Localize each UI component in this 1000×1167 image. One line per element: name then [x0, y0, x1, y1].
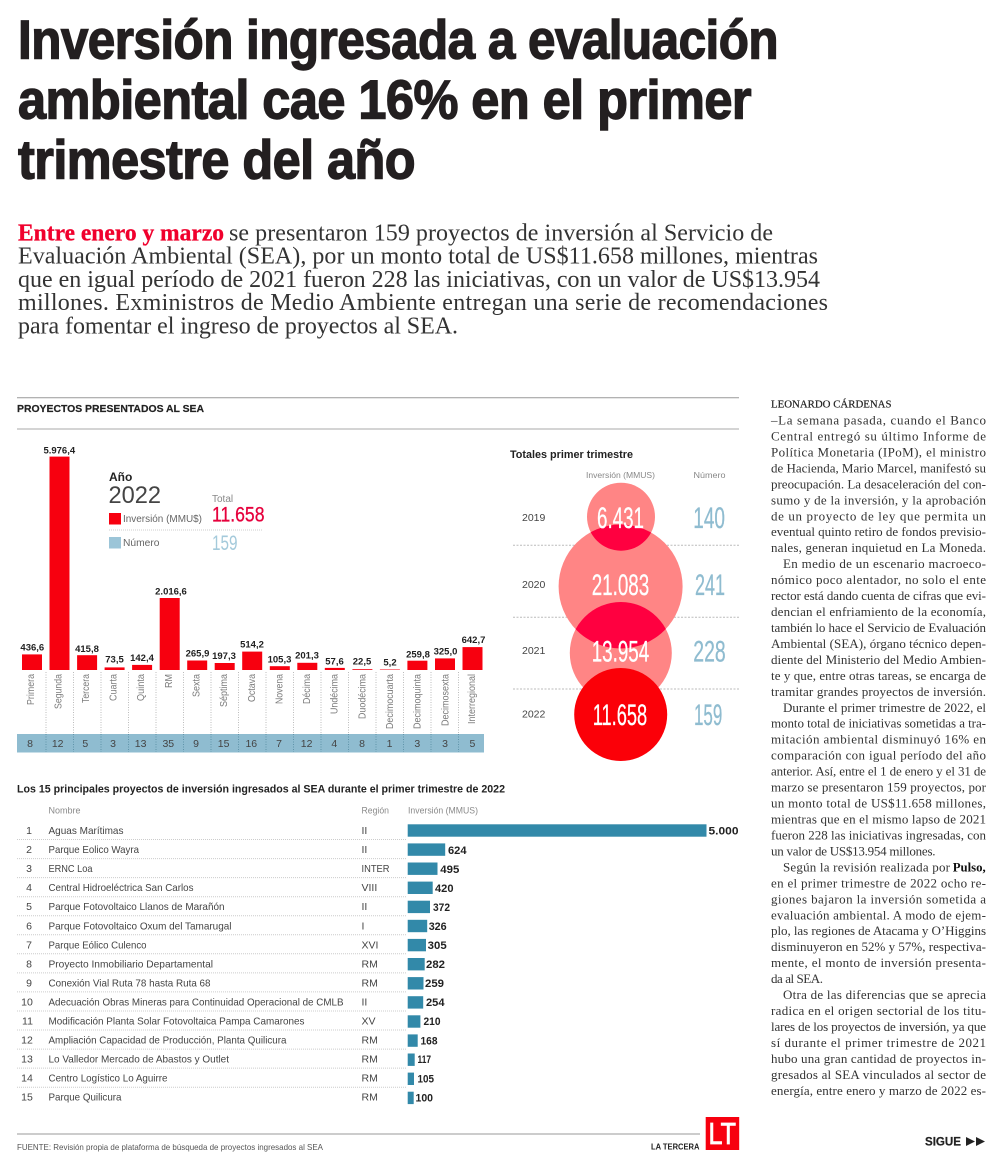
bar values: 5.000: [708, 826, 738, 838]
logo: La Tercera: LT: [708, 1116, 736, 1151]
project names: Conexión Vial Ruta 78 hasta Ruta 68: [48, 977, 211, 989]
region labels: Decimocuarta: [385, 674, 396, 729]
article body: sumo y de la inversión, y la aprobación: [771, 492, 986, 507]
article body: mitación ambiental disminuyó 16% en: [771, 732, 986, 747]
project names: Parque Eolico Wayra: [48, 844, 139, 856]
legend: año 2022: 159: [212, 532, 238, 555]
title: [18, 8, 778, 190]
bar values: 2.016,6: [155, 586, 187, 598]
region labels: Undécima: [330, 674, 340, 714]
horizontal bar chart: [408, 824, 738, 1104]
project names: Parque Fotovoltaico Llanos de Marañón: [48, 901, 225, 913]
rank numbers: [21, 825, 33, 1104]
rank numbers: 6: [26, 920, 32, 932]
bar values: 420: [435, 883, 454, 895]
region labels: [26, 674, 478, 729]
panel: totales primer trimestre: [510, 449, 739, 761]
region codes: XV: [362, 1016, 376, 1028]
region labels: RM: [164, 674, 175, 688]
table headers: Región: [362, 805, 389, 816]
article body: sí durante el primer trimestre de 2021: [771, 1035, 986, 1050]
bar values: 259: [425, 978, 444, 990]
project names: Aguas Marítimas: [48, 825, 124, 837]
bar values: 142,4: [130, 653, 155, 664]
rank numbers: 2: [26, 844, 32, 856]
bar values: [20, 446, 485, 668]
bar chart: inversion by region: [20, 446, 485, 729]
bar values: 105: [418, 1073, 434, 1085]
bar values: 282: [426, 959, 445, 971]
region labels: Decimosexta: [440, 674, 451, 726]
lead paragraph: Entre enero y marzo: [18, 221, 224, 247]
title: trimestre del año: [18, 128, 415, 190]
year labels: 2019: [522, 512, 546, 524]
article body: en el primer trimestre de 2022 ocho re-: [771, 875, 986, 890]
year labels: 2020: [522, 579, 546, 591]
article body: da al SEA.: [771, 971, 823, 986]
bar values: 5,2: [383, 658, 397, 668]
article body: disminuyeron en 52% y 57%, respectiva-: [771, 939, 986, 954]
region labels: Decimoquinta: [413, 674, 424, 729]
region codes: RM: [362, 977, 378, 989]
numero band: 8: [359, 738, 365, 750]
article body: gresados al SEA vinculados al sector de: [771, 1067, 986, 1082]
region labels: Octava: [247, 674, 258, 702]
article body: energía, entre enero y marzo de 2022 es-: [771, 1083, 986, 1098]
project names: Parque Eólico Culenco: [48, 939, 147, 951]
region labels: Segunda: [54, 674, 64, 709]
article body: nómico poco alentador, no solo el ente: [771, 572, 986, 587]
lead paragraph: se presentaron 159 proyectos de inversión al Servicio de: [229, 221, 773, 247]
bar values: [416, 826, 738, 1104]
numero band: 5: [82, 738, 88, 750]
bar values: 168: [420, 1035, 438, 1047]
legend: año 2022: 2022: [108, 482, 161, 509]
section heading: PROYECTOS PRESENTADOS AL SEA: [17, 403, 204, 415]
investment values: 21.083: [592, 569, 649, 602]
article body: te y que, entre otras tareas, se encarga de: [771, 668, 986, 683]
footer source: FUENTE: Revisión propia de plataforma de búsqueda de proyectos ingresados al SEA: [17, 1142, 323, 1152]
project names: Centro Logístico Lo Aguirre: [48, 1073, 168, 1085]
article body: un monto total de US$11.658 millones,: [771, 796, 986, 810]
rank numbers: 4: [26, 882, 32, 894]
numero band: 9: [193, 738, 199, 750]
article body: [770, 412, 987, 1098]
article body: Pulso,: [953, 859, 986, 874]
bar values: 259,8: [406, 650, 430, 660]
project names: Adecuación Obras Mineras para Continuidad Operacional de CMLB: [48, 996, 344, 1008]
title: ambiental cae 16% en el primer: [18, 68, 751, 130]
article body: marzo se presentaron 159 proyectos, por: [771, 780, 987, 795]
year labels: [522, 512, 546, 720]
region codes: II: [362, 901, 367, 913]
article body: preocupación. La desaceleración del con-: [771, 476, 986, 491]
region codes: RM: [362, 1035, 378, 1047]
region labels: Tercera: [81, 674, 92, 703]
article body: fueron 228 las iniciativas ingresadas, con: [771, 828, 986, 842]
region codes: RM: [362, 1073, 378, 1085]
legend: año 2022: Total: [212, 494, 233, 505]
article body: un valor de US$13.954 millones.: [771, 843, 936, 858]
panel: 15 principales proyectos: [17, 784, 738, 1104]
article body: dencian el enfriamiento de la economía,: [771, 604, 986, 619]
year labels: 2021: [522, 645, 546, 657]
numero band: 7: [276, 738, 282, 750]
project names: ERNC Loa: [48, 863, 93, 875]
article body: nales, generan inquietud en La Moneda.: [771, 540, 986, 555]
article body: diente del Ministerio del Medio Ambien-: [771, 652, 986, 667]
article body: hubo una gran cantidad de proyectos in-: [771, 1051, 986, 1066]
bar values: 415,8: [75, 644, 99, 655]
region codes: INTER: [362, 863, 390, 875]
project names: Parque Fotovoltaico Oxum del Tamarugal: [48, 920, 232, 932]
region labels: Cuarta: [109, 674, 120, 701]
numero band: [17, 672, 484, 752]
bar values: 326: [429, 921, 447, 933]
bar values: 73,5: [105, 654, 124, 666]
region labels: Séptima: [219, 674, 230, 707]
project counts: 241: [695, 569, 725, 602]
rank numbers: 3: [26, 863, 32, 875]
rank numbers: 7: [26, 939, 32, 951]
region codes: XVI: [362, 939, 378, 951]
article body: evaluación ambiental. A modo de ejem-: [771, 907, 986, 922]
bar values: 642,7: [462, 635, 485, 646]
region labels: Quinta: [136, 674, 147, 701]
bar values: 514,2: [240, 640, 264, 650]
project counts: 140: [693, 502, 725, 535]
article body: mientras que en el mismo lapso de 2021: [771, 812, 986, 826]
project names: Lo Valledor Mercado de Abastos y Outlet: [48, 1054, 229, 1066]
region codes: II: [362, 996, 367, 1008]
project counts: [693, 502, 726, 732]
panel heading: Los 15 principales proyectos de inversión ingresados al SEA durante el primer trimestre de 2022: [17, 784, 505, 796]
article body: de un proyecto de ley que permita un: [771, 508, 986, 523]
region labels: Interregional: [467, 674, 478, 724]
rank numbers: 8: [26, 958, 32, 970]
numero band: 13: [135, 738, 147, 750]
numero band: 12: [301, 738, 313, 750]
bar values: 100: [416, 1092, 433, 1104]
bar values: 5.976,4: [43, 446, 76, 456]
rank numbers: 15: [21, 1092, 33, 1104]
table headers: [48, 805, 478, 816]
byline: LEONARDO CÁRDENAS: [771, 398, 892, 410]
logo: La Tercera: [651, 1116, 739, 1152]
rank numbers: 5: [26, 901, 32, 913]
bar values: 372: [433, 902, 450, 914]
article body: lares de los proyectos de inversión, ya que: [771, 1019, 986, 1034]
article body: En medio de un escenario macroeco-: [783, 556, 986, 571]
article body: de Hacienda, Mario Marcel, manifestó su: [771, 460, 986, 475]
lead paragraph: que en igual período de 2021 fueron 228 las iniciativas, con un valor de US$13.954: [18, 267, 820, 293]
panel: proyectos presentados al SEA: [17, 398, 739, 752]
table headers: Nombre: [48, 805, 80, 816]
article body: Central entregó su último Informe de: [771, 428, 986, 444]
region codes: RM: [362, 1054, 378, 1066]
numero band: 12: [52, 738, 64, 750]
project counts: 228: [693, 636, 726, 669]
legend: año 2022: [108, 470, 264, 555]
bar values: 201,3: [295, 650, 319, 662]
panel heading: Totales primer trimestre: [510, 449, 633, 461]
numero band: 15: [218, 738, 230, 750]
region codes: II: [362, 825, 367, 837]
article body: Según la revisión realizada por: [783, 859, 951, 874]
bar values: 105,3: [268, 654, 291, 666]
legend: año 2022: 11.658: [212, 504, 264, 527]
column headers: Número: [694, 470, 726, 480]
investment values: [592, 502, 649, 732]
legend: año 2022: Número: [123, 538, 160, 549]
project names: Modificación Planta Solar Fotovoltaica Pampa Camarones: [48, 1016, 304, 1028]
investment values: 6.431: [597, 502, 644, 535]
rank numbers: 14: [21, 1073, 33, 1085]
bar values: 305: [428, 940, 447, 952]
legend: año 2022: Inversión (MMU$): [123, 514, 202, 525]
year labels: 2022: [522, 708, 546, 720]
project names: [48, 825, 344, 1104]
article body: –La semana pasada, cuando el Banco: [770, 412, 986, 428]
numero band: 5: [469, 738, 475, 750]
article body: radica en el origen sectorial de los titu-: [771, 1003, 986, 1018]
project names: Ampliación Capacidad de Producción, Planta Quilicura: [48, 1035, 287, 1047]
bar values: 254: [426, 997, 445, 1009]
lead paragraph: millones. Exministros de Medio Ambiente entregan una serie de recomendaciones: [18, 290, 828, 316]
article body: anterior. Así, entre el 1 de enero y el 31 de: [771, 764, 986, 779]
investment values: 13.954: [592, 636, 649, 669]
bar values: 197,3: [212, 651, 236, 662]
bar values: 495: [440, 864, 459, 876]
legend: año 2022: Año: [109, 470, 132, 484]
project names: Central Hidroeléctrica San Carlos: [48, 882, 194, 894]
article body: también lo hace el Servicio de Evaluación: [771, 620, 986, 635]
article body: mente, el monto de inversión presenta-: [771, 955, 986, 970]
next page marker: [925, 1136, 985, 1148]
bar values: 210: [424, 1016, 440, 1028]
article body: Ambiental (SEA), órgano técnico depen-: [771, 636, 986, 651]
article body: tramitar grandes proyectos de inversión.: [771, 684, 986, 699]
article body: Otra de las diferencias que se aprecia: [783, 987, 986, 1002]
title: Inversión ingresada a evaluación: [18, 8, 778, 70]
article body: Durante el primer trimestre de 2022, el: [783, 700, 986, 715]
bar values: 436,6: [20, 642, 44, 654]
article body: eventual quinto retiro de fondos previsio-: [771, 524, 986, 539]
lead paragraph: Evaluación Ambiental (SEA), por un monto total de US$11.658 millones, mientras: [18, 244, 818, 270]
investment values: 11.658: [593, 699, 647, 732]
rank numbers: 13: [21, 1054, 33, 1066]
region labels: Primera: [26, 674, 37, 705]
numero band: 3: [442, 738, 448, 750]
project names: Parque Quilicura: [48, 1092, 122, 1104]
rank numbers: 9: [26, 977, 32, 989]
logo: La Tercera: LA TERCERA: [651, 1142, 700, 1152]
numero band: 8: [27, 738, 33, 750]
article body: rector está dando cuenta de cifras que evi-: [771, 588, 986, 603]
bubbles: [559, 483, 683, 761]
numero band: 1: [387, 738, 393, 750]
rank numbers: 12: [21, 1035, 33, 1047]
numero band: 3: [110, 738, 116, 750]
numero band: 16: [245, 738, 257, 750]
bar values: 22,5: [353, 656, 372, 668]
lead paragraph: para fomentar el ingreso de proyectos al SEA.: [18, 314, 458, 340]
region labels: Sexta: [192, 674, 202, 697]
bar values: 624: [448, 845, 467, 857]
article body: monto total de iniciativas sometidas a tra-: [771, 716, 986, 731]
column headers: Inversión (MMUS): [586, 470, 655, 480]
region codes: I: [362, 920, 364, 932]
bar values: 325,0: [434, 646, 457, 658]
region codes: RM: [362, 1092, 378, 1104]
region codes: RM: [362, 958, 378, 970]
numero band: 35: [162, 738, 174, 750]
bar values: 57,6: [325, 656, 344, 668]
region labels: Décima: [302, 674, 313, 704]
article body: plo, las regiones de Atacama y O’Higgins: [771, 923, 986, 938]
column headers: [586, 470, 726, 480]
article body: giones bajaron la inversión sometida a: [771, 891, 986, 906]
article column: [770, 398, 987, 1098]
region labels: Novena: [274, 674, 286, 704]
project counts: 159: [694, 699, 722, 732]
next page marker: SIGUE: [925, 1136, 961, 1148]
article body: comparación con igual período del año: [771, 748, 986, 763]
table headers: Inversión (MMUS): [408, 805, 478, 816]
bar values: 265,9: [186, 648, 209, 660]
rank numbers: 10: [21, 996, 33, 1008]
numero band: 3: [414, 738, 420, 750]
lead paragraph: [18, 221, 828, 340]
project names: Proyecto Inmobiliario Departamental: [48, 958, 213, 970]
region codes: VIII: [362, 882, 377, 894]
bar values: 117: [418, 1054, 431, 1066]
region labels: Duodécima: [358, 674, 368, 719]
rank numbers: 1: [26, 825, 32, 837]
rank numbers: 11: [22, 1016, 33, 1028]
numero band: 4: [331, 738, 337, 750]
region codes: [362, 825, 390, 1104]
article body: Política Monetaria (IPoM), el ministro: [771, 444, 986, 459]
region codes: II: [362, 844, 367, 856]
